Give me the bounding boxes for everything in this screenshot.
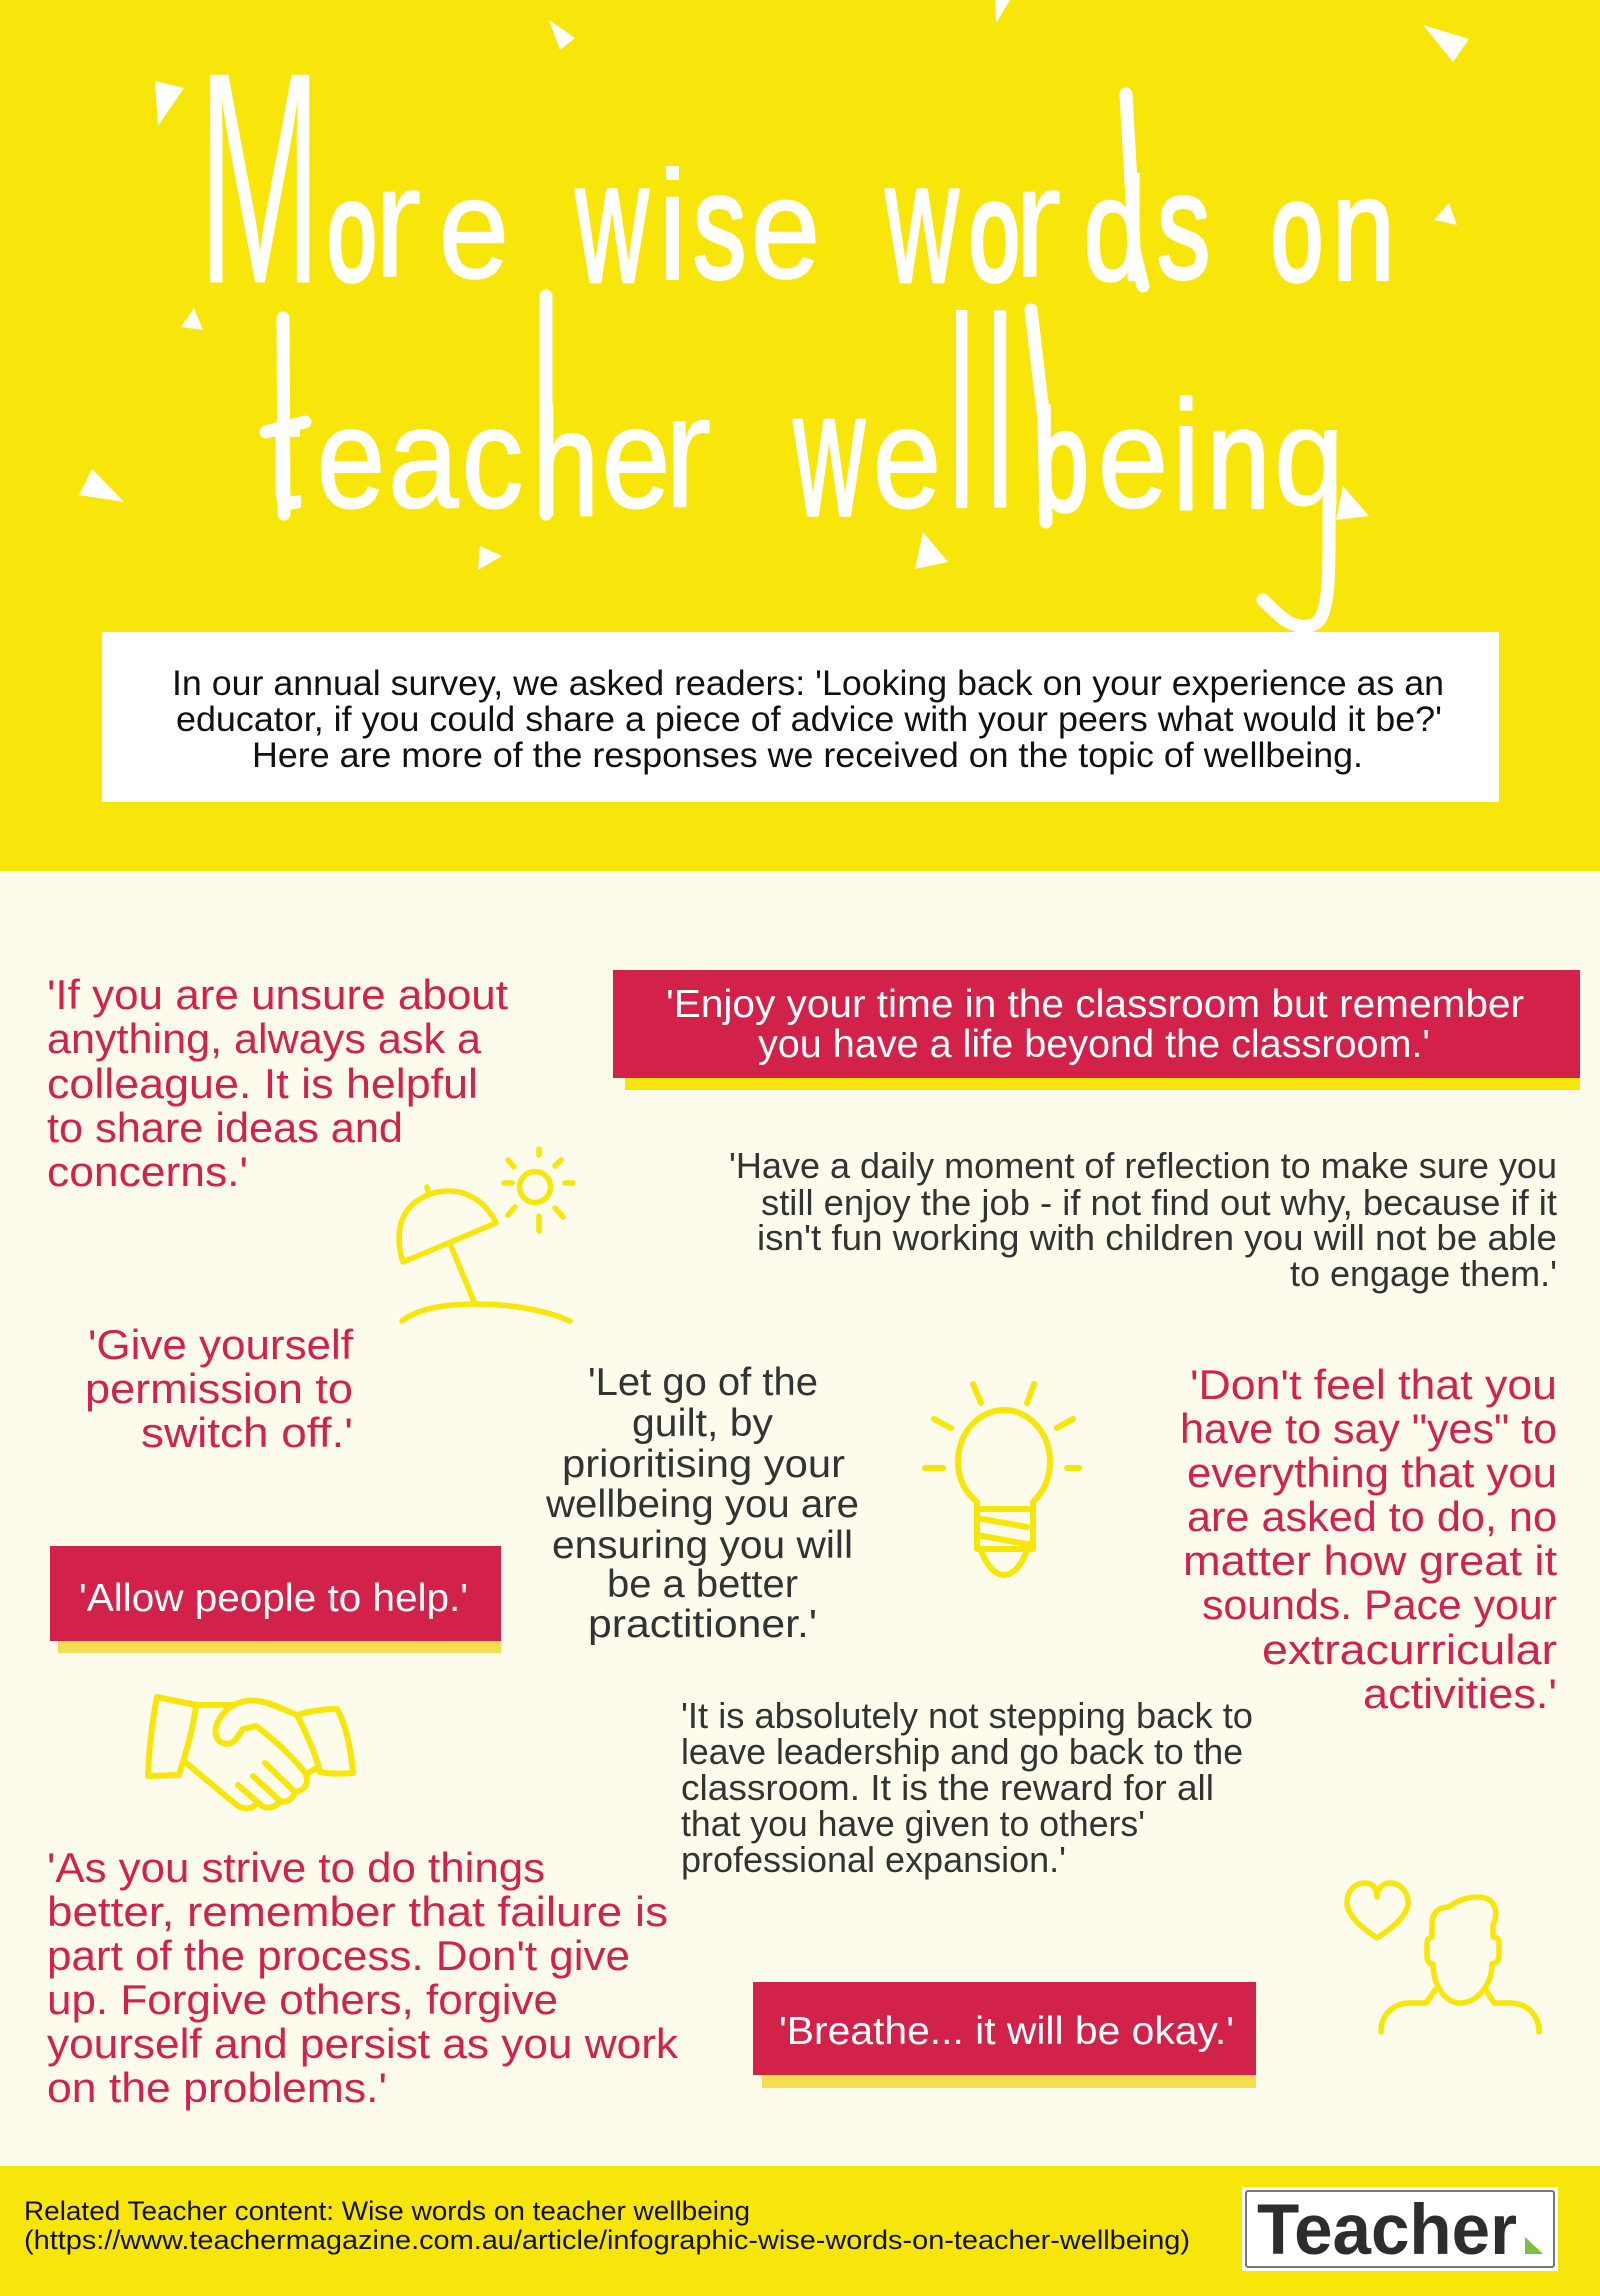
title: h bbox=[534, 379, 599, 547]
quote: stepping back bbox=[681, 1695, 1253, 1880]
title: e bbox=[317, 378, 385, 538]
quote: daily reflection: 'Have a daily moment of reflection to make sure you bbox=[729, 1145, 1557, 1186]
quote: let go of the guilt: ensuring you will bbox=[552, 1524, 853, 1567]
icon: light bulb bbox=[925, 1384, 1079, 1575]
title: a bbox=[388, 378, 459, 538]
panel: yellow header bbox=[0, 0, 1600, 871]
quote: daily reflection bbox=[729, 1145, 1557, 1294]
title: w bbox=[885, 126, 959, 319]
footer text: (https://www.teachermagazine.com.au/article/infographic-wise-words-on-teacher-wellbeing) bbox=[24, 2225, 1190, 2255]
quote: stepping back: 'It is absolutely not stepping back to bbox=[681, 1695, 1253, 1736]
quote: let go of the guilt: practitioner.' bbox=[588, 1603, 817, 1646]
title: w bbox=[575, 126, 649, 319]
banner: breathe bbox=[753, 1982, 1256, 2088]
intro text bbox=[172, 664, 1444, 775]
banner: allow people to help: 'Allow people to help.' bbox=[79, 1577, 468, 1620]
title: s bbox=[693, 141, 746, 310]
quote: ask a colleague bbox=[47, 971, 508, 1195]
quote: ask a colleague: 'If you are unsure about bbox=[47, 971, 508, 1018]
panel: footer bbox=[0, 2166, 1600, 2296]
quote: stepping back: leave leadership and go back to the bbox=[681, 1731, 1243, 1772]
quote: don't say yes: sounds. Pace your bbox=[1202, 1581, 1557, 1628]
quote: switch off: switch off.' bbox=[141, 1409, 353, 1456]
quote: ask a colleague: colleague. It is helpful bbox=[47, 1060, 478, 1107]
quote: don't say yes: everything that you bbox=[1187, 1449, 1557, 1496]
title: o bbox=[969, 152, 1020, 309]
quote: switch off bbox=[85, 1321, 353, 1456]
title: e bbox=[602, 378, 670, 538]
quote: don't say yes: have to say "yes" to bbox=[1180, 1405, 1557, 1452]
title: l bbox=[949, 263, 974, 564]
title: d bbox=[1084, 150, 1146, 311]
quote: failure is part of the process: up. Forgive others, forgive bbox=[47, 1976, 558, 2023]
quote: stepping back: classroom. It is the reward for all bbox=[681, 1767, 1214, 1808]
title: b bbox=[1034, 381, 1089, 540]
footer text: Related Teacher content: Wise words on teacher wellbeing bbox=[24, 2196, 750, 2226]
quote: ask a colleague: concerns.' bbox=[47, 1148, 248, 1195]
title: n bbox=[1207, 380, 1270, 538]
banner: enjoy your time: you have a life beyond the classroom.' bbox=[758, 1023, 1430, 1066]
title: e bbox=[873, 378, 941, 538]
quote: don't say yes: extracurricular bbox=[1262, 1626, 1557, 1673]
logo: Teacher: Teacher bbox=[1257, 2191, 1517, 2270]
banner: enjoy your time: 'Enjoy your time in the classroom but remember bbox=[666, 983, 1524, 1026]
quote: failure is part of the process bbox=[47, 1844, 679, 2111]
footer text bbox=[24, 2196, 1190, 2255]
quote: daily reflection: isn't fun working with children you will not be able bbox=[757, 1217, 1557, 1258]
intro text: In our annual survey, we asked readers: 'Looking back on your experience as an bbox=[172, 664, 1444, 703]
title: c bbox=[462, 378, 523, 538]
quote: let go of the guilt: prioritising your bbox=[562, 1443, 845, 1486]
quote: let go of the guilt: be a better bbox=[607, 1563, 798, 1606]
title: M bbox=[198, 11, 321, 347]
icon: beach umbrella and sun bbox=[399, 1149, 573, 1321]
quote: let go of the guilt: wellbeing you are bbox=[545, 1483, 859, 1526]
title: i bbox=[1172, 368, 1200, 543]
title bbox=[198, 11, 1395, 626]
title: i bbox=[657, 140, 688, 313]
quote: don't say yes: matter how great it bbox=[1183, 1537, 1557, 1584]
quote: let go of the guilt bbox=[545, 1361, 859, 1646]
title: r bbox=[1013, 133, 1062, 311]
quote: ask a colleague: to share ideas and bbox=[47, 1104, 403, 1151]
title: g bbox=[1274, 379, 1344, 535]
intro text: educator, if you could share a piece of advice with your peers what would it be?' bbox=[176, 700, 1442, 739]
quote: daily reflection: to engage them.' bbox=[1290, 1253, 1557, 1294]
panel: intro text box bbox=[102, 632, 1499, 802]
quote: switch off: 'Give yourself bbox=[88, 1321, 353, 1368]
quote: failure is part of the process: better, remember that failure is bbox=[47, 1888, 668, 1935]
confetti triangles bbox=[79, 0, 1469, 570]
quote: failure is part of the process: yourself and persist as you work bbox=[47, 2020, 679, 2067]
intro text: Here are more of the responses we received on the topic of wellbeing. bbox=[252, 736, 1363, 775]
quote: failure is part of the process: 'As you strive to do things bbox=[47, 1844, 545, 1891]
quote: switch off: permission to bbox=[85, 1365, 353, 1412]
banner: enjoy your time bbox=[613, 970, 1580, 1090]
title: e bbox=[438, 148, 509, 308]
title: e bbox=[1098, 378, 1168, 538]
title: r bbox=[663, 361, 712, 542]
quote: daily reflection: still enjoy the job - if not find out why, because if it bbox=[761, 1182, 1557, 1223]
title: o bbox=[1271, 155, 1323, 310]
title: o bbox=[327, 153, 376, 309]
quote: let go of the guilt: 'Let go of the bbox=[588, 1361, 818, 1404]
title: l bbox=[986, 264, 1014, 564]
icon: person with heart bbox=[1347, 1883, 1539, 2032]
quote: failure is part of the process: part of the process. Don't give bbox=[47, 1932, 630, 1979]
quote: don't say yes: are asked to do, no bbox=[1187, 1493, 1557, 1540]
quote: stepping back: professional expansion.' bbox=[681, 1839, 1066, 1880]
title: t bbox=[268, 369, 301, 540]
title: r bbox=[373, 133, 422, 311]
title: e bbox=[751, 149, 820, 308]
quote: stepping back: that you have given to others' bbox=[681, 1803, 1145, 1844]
title: n bbox=[1332, 146, 1395, 311]
quote: don't say yes: 'Don't feel that you bbox=[1190, 1361, 1557, 1408]
quote: let go of the guilt: guilt, by bbox=[632, 1402, 774, 1445]
title: s bbox=[1157, 141, 1210, 310]
banner: allow people to help bbox=[50, 1546, 501, 1653]
title: w bbox=[793, 353, 865, 553]
quote: don't say yes bbox=[1180, 1361, 1557, 1717]
icon: handshake bbox=[148, 1697, 353, 1808]
quote: ask a colleague: anything, always ask a bbox=[47, 1015, 482, 1062]
quote: don't say yes: activities.' bbox=[1363, 1670, 1557, 1717]
banner: breathe: 'Breathe... it will be okay.' bbox=[779, 2010, 1234, 2053]
quote: failure is part of the process: on the problems.' bbox=[47, 2064, 387, 2111]
